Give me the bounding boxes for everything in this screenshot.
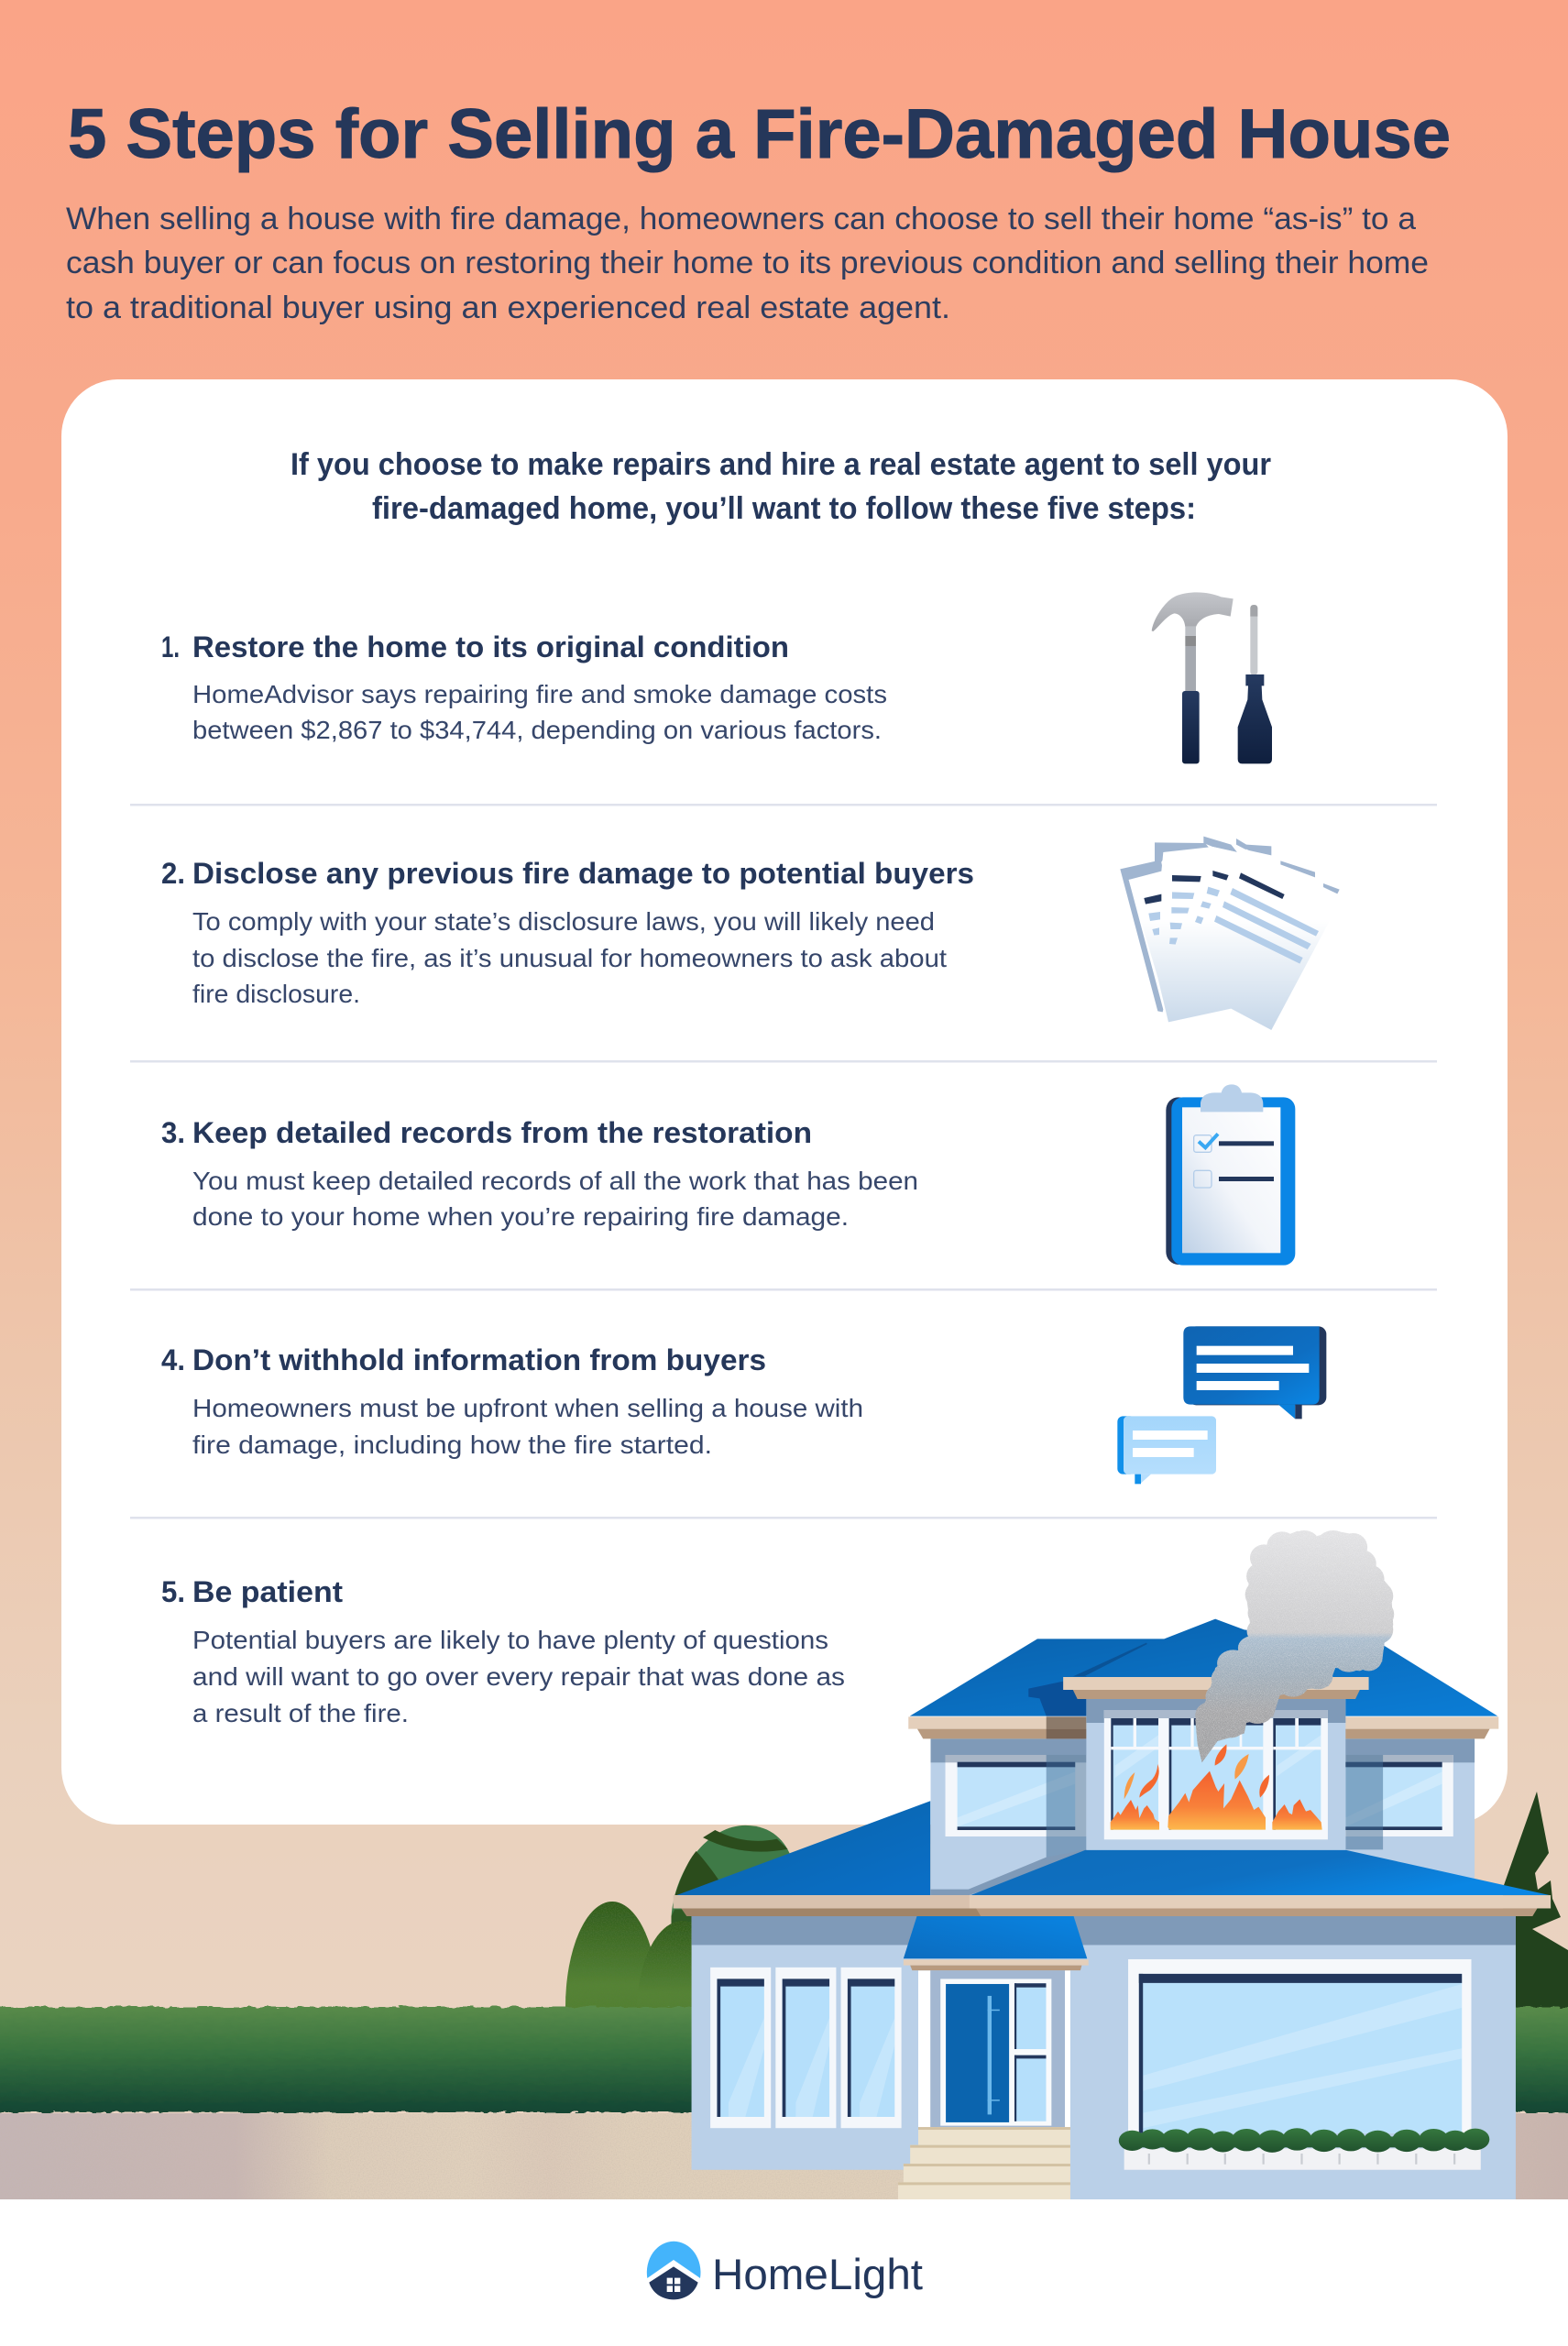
- step 5 text: a result of the fire.: [192, 1699, 409, 1727]
- large picture window: [1128, 1959, 1472, 2133]
- intro paragraph: When selling a house with fire damage, homeowners can choose to sell their home “as-is” to a: [66, 202, 1416, 236]
- card lead-in heading: If you choose to make repairs and hire a real estate agent to sell your: [291, 447, 1271, 482]
- smoke plume: [1195, 1530, 1394, 1762]
- step 4 text: [161, 1343, 863, 1459]
- lower right roof: [970, 1850, 1550, 1895]
- step 2 text: to disclose the fire, as it’s unusual for homeowners to ask about: [192, 944, 947, 972]
- intro paragraph: cash buyer or can focus on restoring their home to its previous condition and selling their home: [66, 246, 1429, 280]
- intro paragraph: [66, 202, 1429, 325]
- ground: [0, 2113, 1568, 2199]
- front steps: [898, 2127, 1070, 2200]
- step 1 text: [161, 630, 887, 744]
- step 2 text: 2.: [161, 857, 185, 890]
- lower storey: [674, 1801, 1551, 2200]
- flames: [1111, 1800, 1159, 1830]
- step 5 text: Potential buyers are likely to have plenty of questions: [192, 1626, 828, 1654]
- centre window frame: [1104, 1710, 1328, 1839]
- step 1 text: HomeAdvisor says repairing fire and smoke damage costs: [192, 680, 887, 708]
- tree behind house: [672, 1825, 795, 2004]
- step 4 text: Don’t withhold information from buyers: [192, 1343, 766, 1376]
- entry surround: [918, 1970, 1070, 2127]
- title: 5 Steps for Selling a Fire-Damaged House: [68, 95, 1451, 173]
- step 5 text: [161, 1575, 845, 1727]
- left triple window: [710, 1968, 902, 2128]
- window panes: [1111, 1718, 1321, 1830]
- logo wordmark: HomeLight: [712, 2250, 923, 2298]
- centre window panes and flames: [1111, 1718, 1322, 1830]
- step 3 text: done to your home when you’re repairing fire damage.: [192, 1202, 849, 1231]
- step 1 text: between $2,867 to $34,744, depending on various factors.: [192, 716, 882, 744]
- bushes: [565, 1902, 729, 2112]
- planter box with shrubs: [1119, 2128, 1489, 2170]
- right side window: [1342, 1755, 1453, 1836]
- step 2 text: [161, 857, 974, 1008]
- step 3 text: Keep detailed records from the restoration: [192, 1116, 812, 1149]
- lower walls: [692, 1916, 1516, 2200]
- intro paragraph: to a traditional buyer using an experienced real estate agent.: [66, 291, 950, 325]
- footer white band: [0, 2199, 1568, 2346]
- hedge: [0, 2007, 1568, 2112]
- icon: chat bubbles: [1117, 1326, 1326, 1484]
- dormer shadows: [1047, 1755, 1086, 1858]
- porch roof: [904, 1916, 1089, 1970]
- left side window: [946, 1755, 1086, 1836]
- front door: [940, 1979, 1051, 2126]
- lower left roof: [676, 1801, 930, 1895]
- step 3 text: [161, 1116, 918, 1231]
- step 1 text: 1.: [161, 630, 180, 663]
- dormer wall: [1086, 1699, 1345, 1849]
- step 2 text: To comply with your state’s disclosure laws, you will likely need: [192, 907, 935, 936]
- step 2 text: Disclose any previous fire damage to potential buyers: [192, 857, 974, 890]
- step 1 text: Restore the home to its original condition: [192, 630, 789, 663]
- white content card: [61, 379, 1508, 1825]
- lower eaves: [674, 1895, 1551, 1908]
- icon: fanned documents: [1120, 837, 1343, 1030]
- upper eaves: [908, 1716, 1498, 1729]
- step 4 text: 4.: [161, 1343, 185, 1376]
- upper wall: [931, 1738, 1475, 1895]
- step 5 text: 5.: [161, 1575, 185, 1608]
- scenery: trees, hedge and ground: [0, 1792, 1568, 2199]
- step 2 text: fire disclosure.: [192, 980, 360, 1008]
- card lead-in heading: [291, 447, 1271, 526]
- upper storey: [908, 1619, 1498, 1895]
- step 5 text: and will want to go over every repair that was done as: [192, 1662, 845, 1691]
- upper roof: [910, 1619, 1497, 1716]
- card lead-in heading: fire-damaged home, you’ll want to follow these five steps:: [372, 491, 1196, 526]
- step 4 text: Homeowners must be upfront when selling a house with: [192, 1394, 863, 1422]
- icon: hammer and screwdriver: [1152, 592, 1272, 763]
- HomeLight logo: [647, 2242, 923, 2299]
- pine tree right: [1503, 1792, 1568, 2016]
- step 5 text: Be patient: [192, 1575, 343, 1608]
- illustration: house on fire: [674, 1530, 1551, 2200]
- step 3 text: 3.: [161, 1116, 185, 1149]
- dormer eaves: [1063, 1677, 1369, 1690]
- logo mark: [647, 2242, 700, 2299]
- step 4 text: fire damage, including how the fire started.: [192, 1431, 712, 1459]
- step 3 text: You must keep detailed records of all the work that has been: [192, 1167, 918, 1195]
- icon: clipboard checklist: [1166, 1084, 1295, 1266]
